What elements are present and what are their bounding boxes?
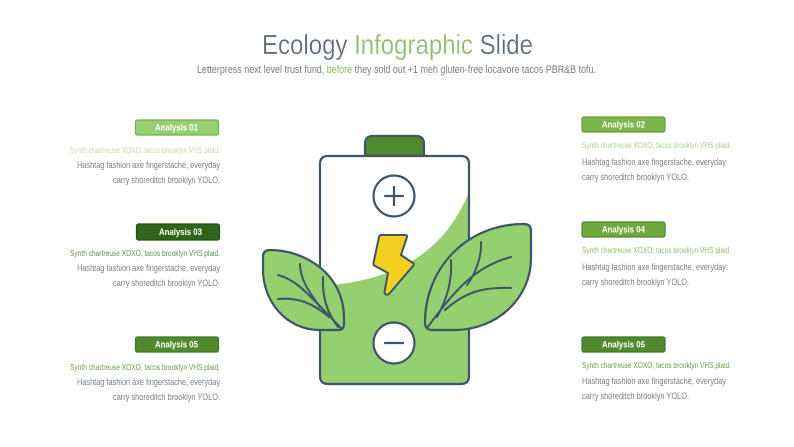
icon: right leaf [425,224,531,330]
text: analysis 06: Hashtag fashion axe fingerstache, everyday [582,376,726,386]
label: analysis 06 [582,337,665,352]
icon: battery charge level [320,192,469,384]
label: analysis 04: Analysis 04 [602,224,645,234]
text: analysis 03: Hashtag fashion axe fingerstache, everyday [77,263,220,273]
icon: battery body fill [320,156,469,384]
panel: analysis 03 [70,224,220,288]
label: analysis 05: Analysis 05 [155,340,198,350]
text: analysis 05: Hashtag fashion axe fingerstache, everyday [77,377,220,387]
panel: analysis 04 [582,222,731,287]
icon: left leaf [263,250,344,330]
text: analysis 04: Hashtag fashion axe fingerstache, everyday [582,262,726,272]
panel: analysis 05 [70,337,220,402]
text: analysis 02: carry shoreditch brooklyn YOLO. [582,172,689,182]
text: analysis 01: carry shoreditch brooklyn YOLO. [113,175,220,185]
text: analysis 05 [70,363,220,402]
label: analysis 02: Analysis 02 [602,120,645,130]
text: analysis 06 [582,361,731,401]
icon: battery cap [365,136,424,156]
text: analysis 05: Synth chartreuse XOXO, tacos brooklyn VHS plaid. [70,363,220,372]
label: analysis 03: Analysis 03 [159,227,202,237]
label: analysis 05 [136,337,218,352]
text: analysis 04: carry shoreditch brooklyn YOLO. [582,277,689,287]
text: analysis 04 [582,246,731,287]
label: analysis 01: Analysis 01 [155,122,198,132]
text: analysis 01: Hashtag fashion axe fingerstache, everyday [77,160,220,170]
title: Ecology Infographic Slide [262,29,533,60]
text: analysis 02: Synth chartreuse XOXO, tacos brooklyn VHS plaid. [582,141,731,150]
text: analysis 02: Hashtag fashion axe fingerstache, everyday [582,157,726,167]
text: analysis 06: carry shoreditch brooklyn YOLO. [582,391,689,401]
text: analysis 01 [70,146,220,185]
text: analysis 06: Synth chartreuse XOXO, tacos brooklyn VHS plaid. [582,361,731,370]
label: analysis 04 [582,222,665,237]
text: analysis 03 [70,249,220,288]
panel: analysis 02 [582,117,731,182]
icon: plus terminal [374,176,414,216]
label: analysis 03 [136,224,220,240]
subtitle: Letterpress next level trust fund, before they sold out +1 meh gluten-free locavore tacos PBR&B tofu. [197,64,596,76]
label: analysis 01 [136,120,218,135]
label: analysis 06: Analysis 06 [602,340,645,350]
text: analysis 04: Synth chartreuse XOXO, tacos brooklyn VHS plaid. [582,246,731,255]
text: analysis 03: carry shoreditch brooklyn YOLO. [113,278,220,288]
text: analysis 03: Synth chartreuse XOXO, tacos brooklyn VHS plaid. [70,249,220,258]
icon: lightning bolt [373,235,414,295]
text: analysis 02 [582,141,731,182]
icon: battery outline [320,156,469,384]
panel: analysis 06 [582,337,731,401]
panel: analysis 01 [70,120,220,185]
icon: minus terminal [374,322,414,364]
text: analysis 01: Synth chartreuse XOXO, tacos brooklyn VHS plaid. [70,146,220,155]
battery illustration [263,136,531,384]
text: analysis 05: carry shoreditch brooklyn YOLO. [113,392,220,402]
label: analysis 02 [582,117,665,132]
